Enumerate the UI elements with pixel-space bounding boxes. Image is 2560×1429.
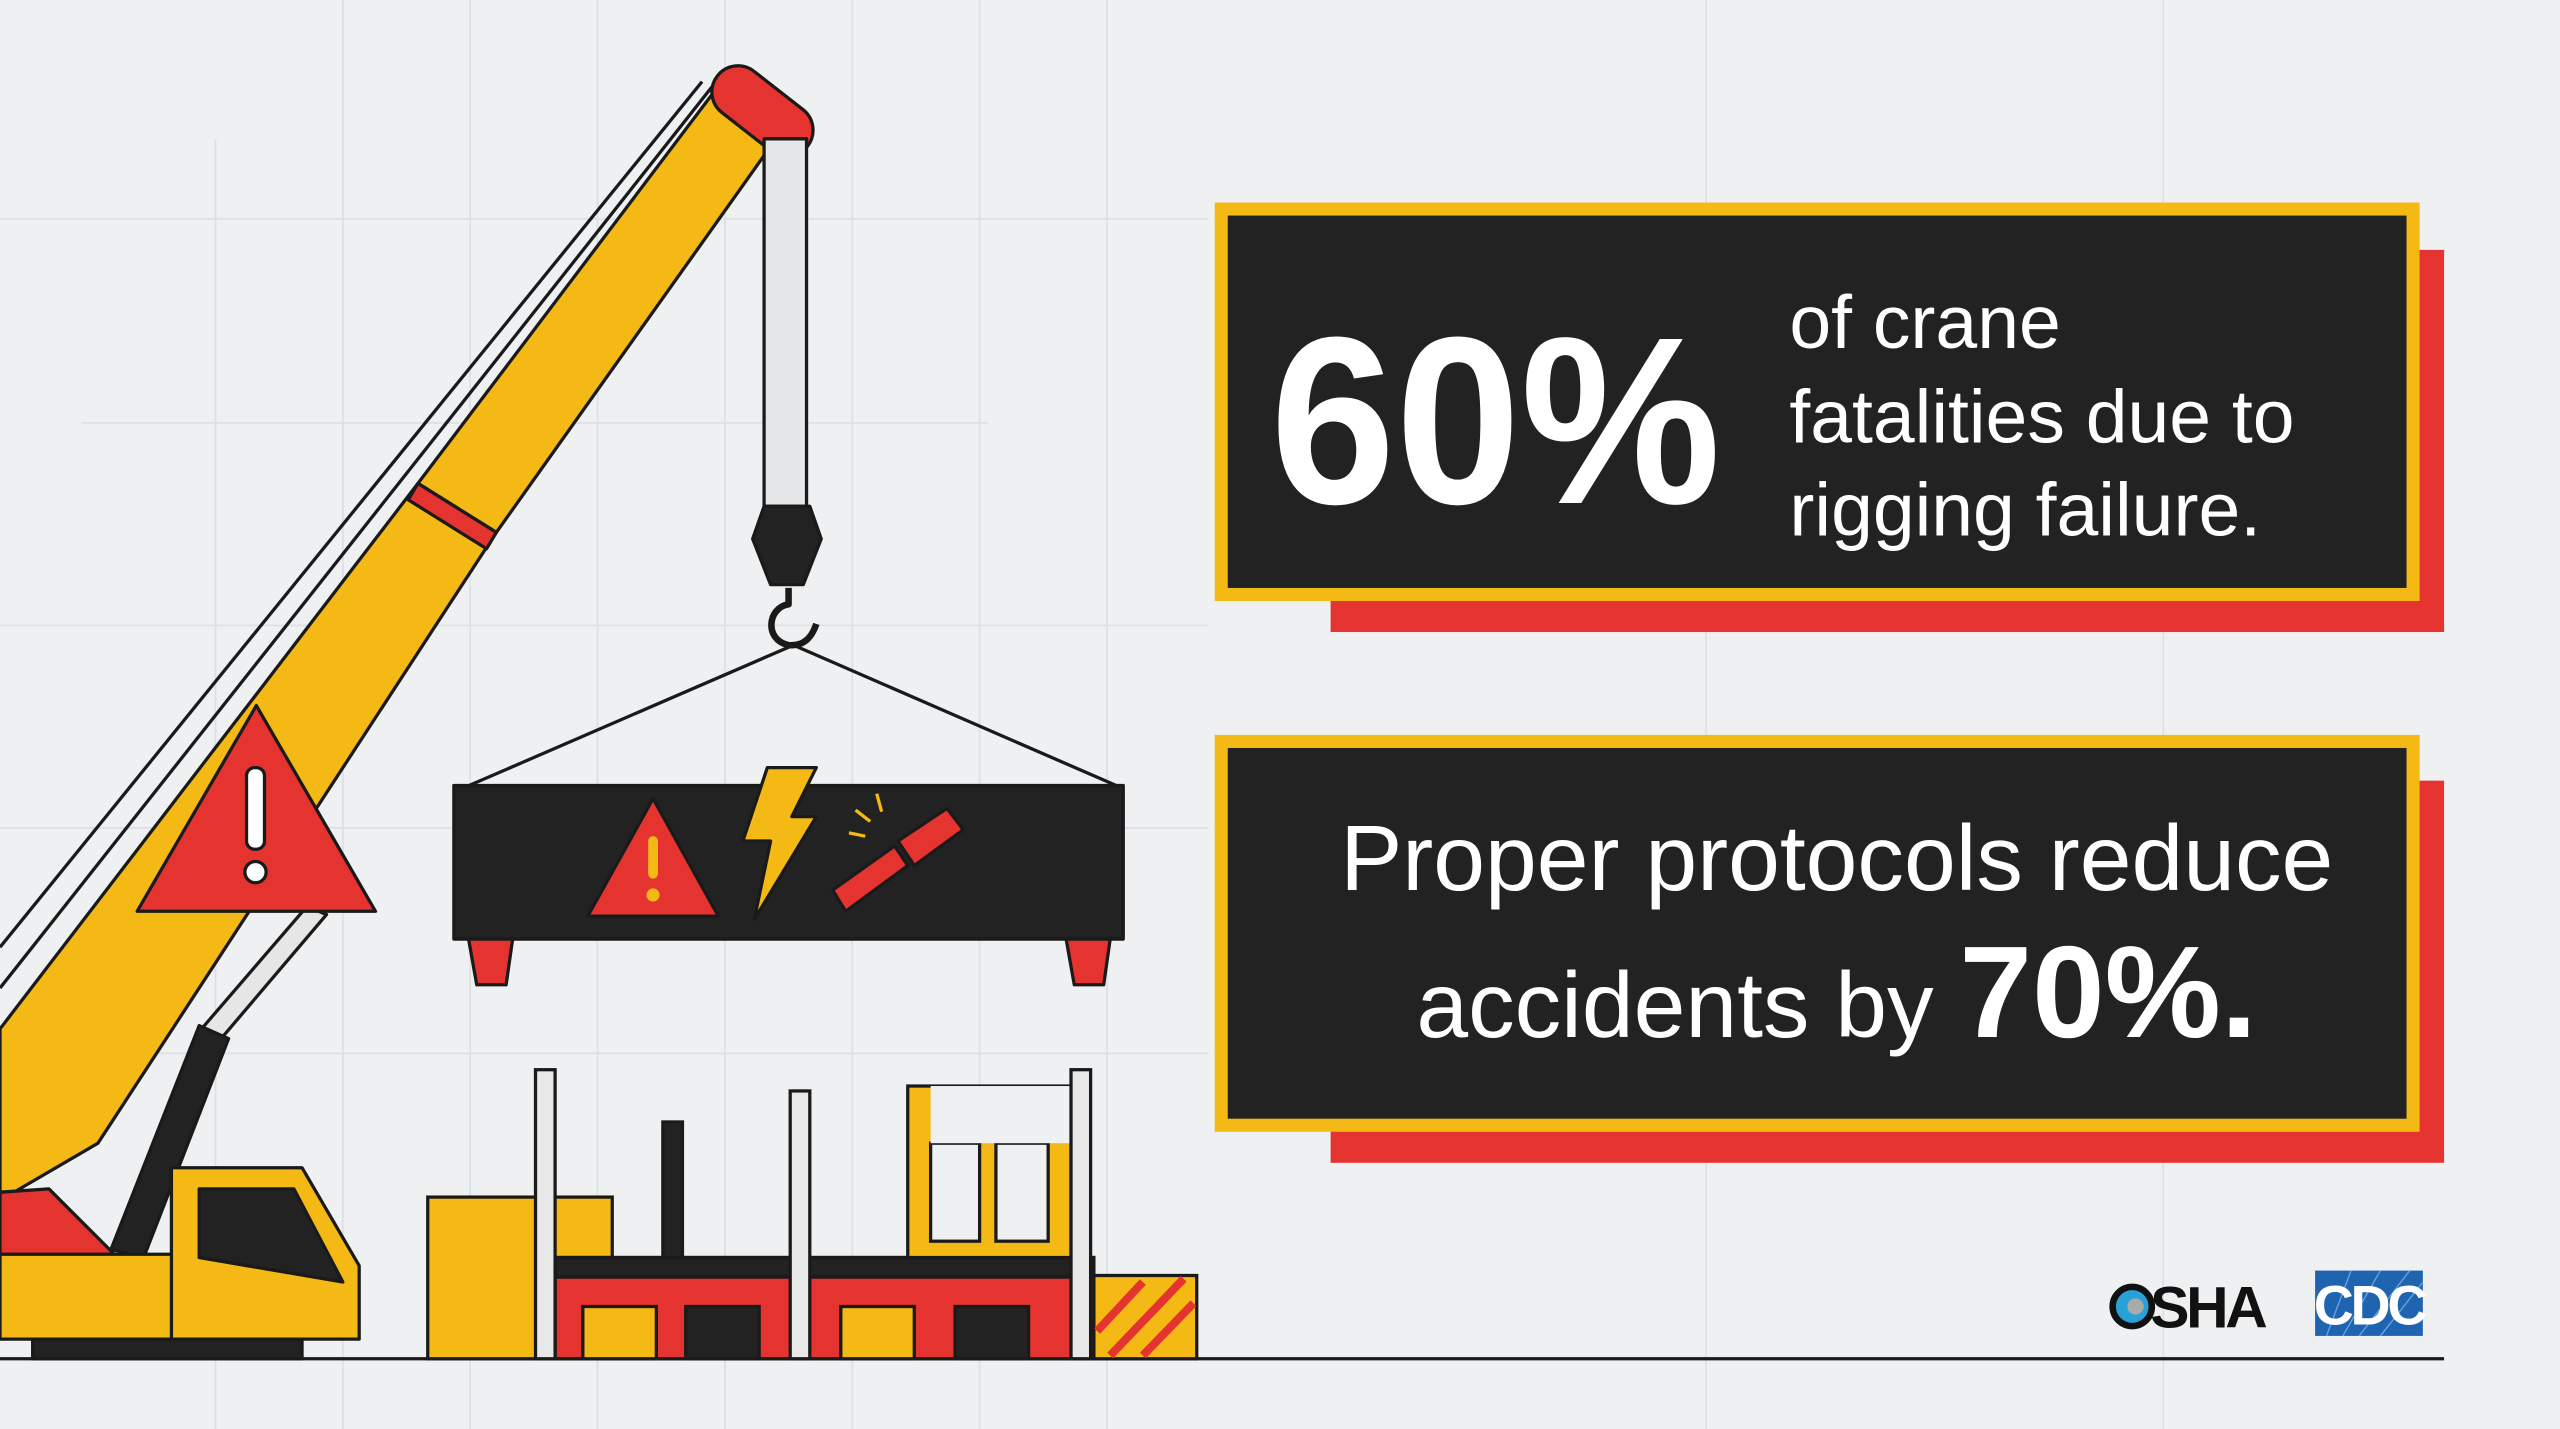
crane boom: [0, 95, 777, 1200]
logo: OSHA: SHA: [2150, 1276, 2266, 1341]
icon: broken beam: [833, 794, 963, 911]
warning sign on boom: [137, 706, 376, 911]
stat description: of crane: [1789, 280, 2061, 364]
hydraulic cylinder: [111, 906, 327, 1258]
slings: [465, 645, 1120, 787]
buildings: [428, 1070, 1197, 1359]
stat description: rigging failure.: [1789, 468, 2261, 552]
panel: rigging failure stat: [1221, 209, 2444, 632]
crane cables: [0, 82, 713, 988]
truck: [0, 1168, 359, 1359]
stat 60%: 60%: [1270, 287, 1721, 554]
icon: lightning: [743, 768, 816, 919]
logo: CDC: CDC: [2314, 1274, 2426, 1336]
panel: protocols stat: [1221, 741, 2444, 1163]
boom head: [701, 55, 824, 167]
hook block: [753, 506, 821, 645]
stat description: fatalities due to: [1789, 375, 2295, 459]
hoist ropes: [764, 139, 807, 506]
protocols text: Proper protocols reduce: [1340, 806, 2333, 910]
protocols text: accidents by 70%.: [1416, 919, 2257, 1065]
ground line: [0, 1358, 2444, 1360]
load: [454, 768, 1123, 985]
crane: [0, 55, 1120, 1359]
icon: warning: [588, 799, 718, 916]
